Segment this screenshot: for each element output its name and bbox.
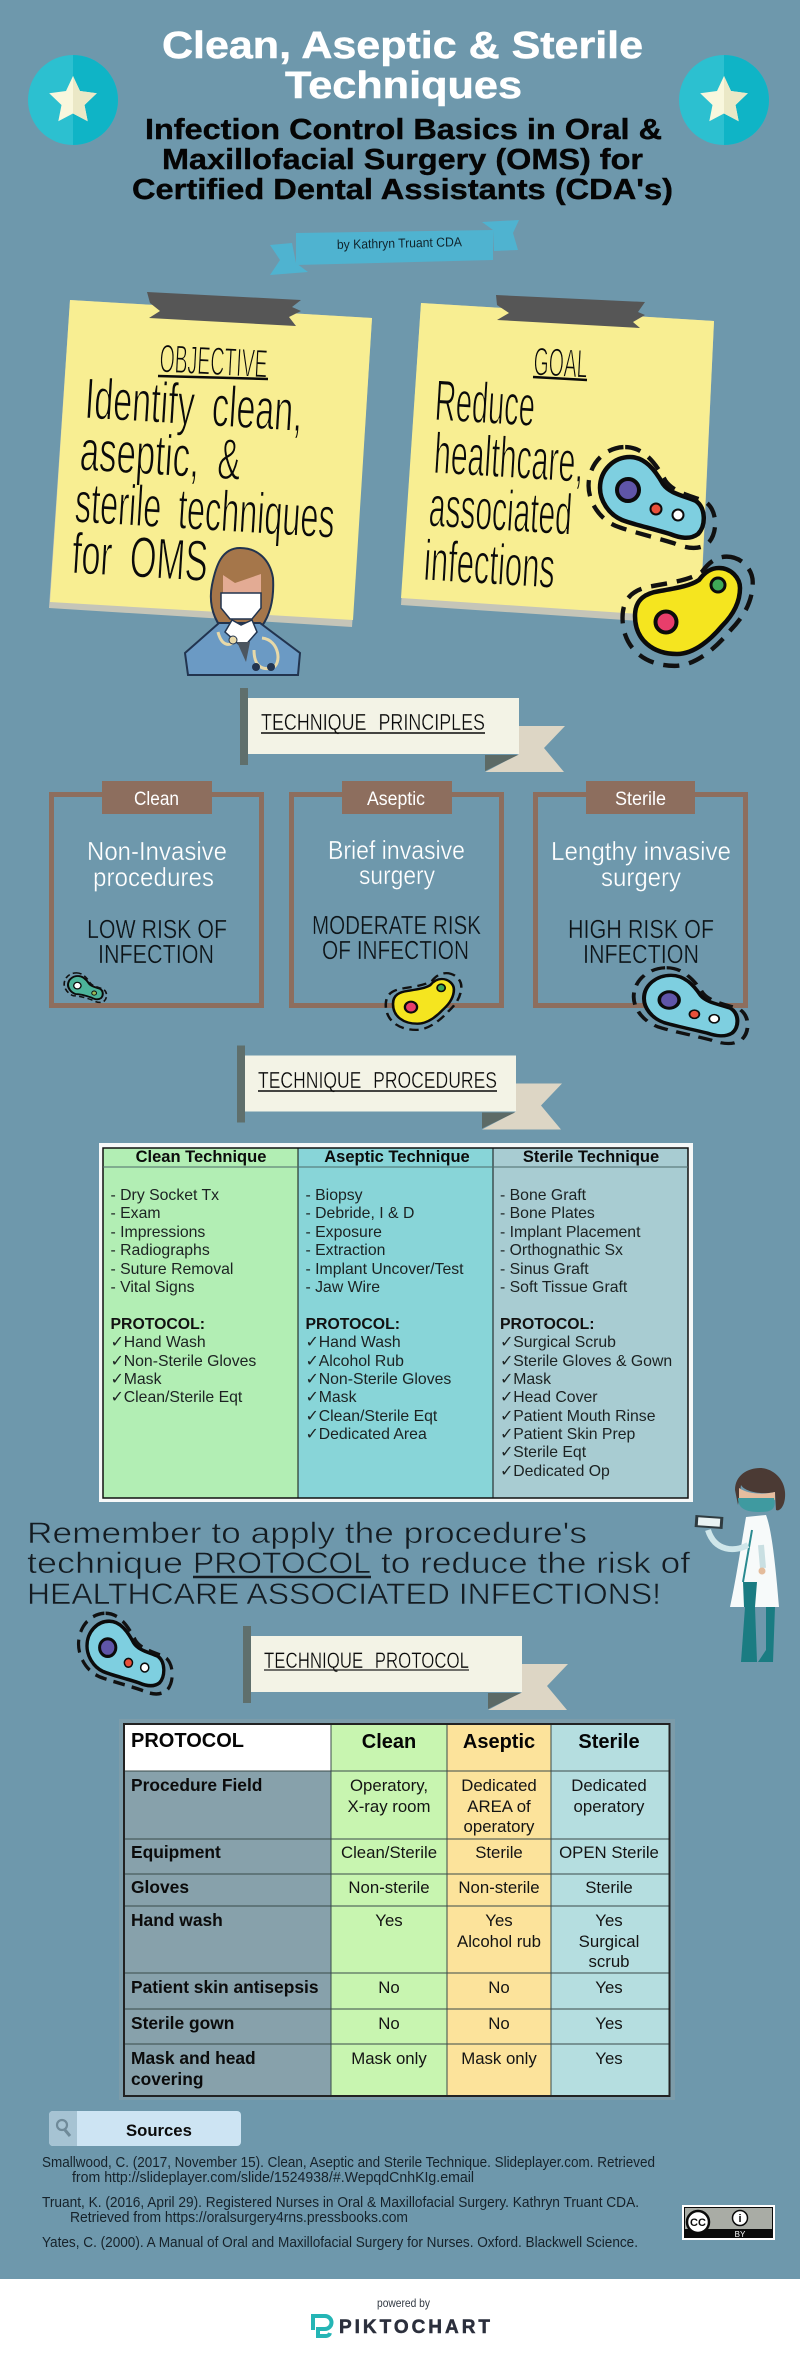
column: aseptic technique: ✓Dedicated Area — [306, 1426, 427, 1443]
row: procedure field: operatory — [464, 1817, 535, 1836]
row: procedure field: AREA of — [467, 1797, 531, 1816]
references: Retrieved from https://oralsurgery4rns.pressbooks.com — [70, 2209, 408, 2226]
references: Yates, C. (2000). A Manual of Oral and Maxillofacial Surgery for Nurses. Oxford. Blackwell Science. — [42, 2234, 638, 2251]
clean description: procedures — [93, 862, 214, 892]
column: sterile technique: - Bone Plates — [500, 1205, 595, 1222]
reminder text — [27, 1517, 691, 1611]
sterile tab: Sterile — [615, 789, 666, 810]
aseptic risk — [312, 910, 482, 965]
row: gloves: Gloves — [131, 1877, 189, 1897]
icon: star badge right — [679, 55, 769, 145]
icon: blue bacteria on sterile card — [634, 968, 748, 1043]
row: sterile gown — [131, 2013, 623, 2033]
row: patient skin antisepsis: No — [378, 1978, 400, 1997]
sterile risk: INFECTION — [583, 939, 699, 969]
title: Techniques — [285, 65, 522, 107]
column: sterile technique: - Bone Graft — [500, 1187, 587, 1204]
column: sterile technique: PROTOCOL: — [500, 1316, 594, 1333]
objective text: sterile techniques — [73, 470, 337, 551]
panel: objective sticky note: OBJECTIVE — [159, 337, 269, 387]
icon: star badge left — [28, 55, 118, 145]
column: sterile technique: ✓Patient Mouth Rinse — [500, 1408, 656, 1425]
heading: technique protocol — [243, 1626, 568, 1710]
row: equipment: OPEN Sterile — [559, 1843, 659, 1862]
sterile tab — [586, 781, 695, 814]
heading: technique principles: TECHNIQUE PRINCIPLES — [261, 709, 485, 735]
tape — [147, 292, 301, 326]
protocol header row: Sterile — [578, 1731, 640, 1753]
footer: powered by — [377, 2296, 430, 2310]
row: equipment: Sterile — [475, 1843, 523, 1862]
protocol header row: PROTOCOL — [131, 1730, 244, 1752]
reminder text: technique — [27, 1547, 183, 1580]
column: aseptic technique — [306, 1148, 470, 1443]
column: clean technique: - Radiographs — [110, 1242, 210, 1259]
clean tab — [102, 781, 212, 814]
author ribbon: by Kathryn Truant CDA — [337, 234, 462, 252]
reminder text: HEALTHCARE ASSOCIATED INFECTIONS! — [27, 1578, 661, 1611]
row: mask and head covering — [131, 2048, 623, 2089]
panel: goal sticky note: GOAL — [533, 340, 589, 387]
column: clean technique: ✓Mask — [110, 1371, 162, 1388]
icon: dentist with mask — [185, 548, 300, 675]
goal text: Reduce — [433, 368, 537, 439]
column: clean technique: ✓Clean/Sterile Eqt — [110, 1389, 243, 1406]
panel: goal sticky note — [401, 295, 714, 625]
column: aseptic technique: - Implant Uncover/Test — [306, 1261, 464, 1278]
column: clean technique: - Impressions — [110, 1224, 205, 1241]
objective text: aseptic, & — [78, 418, 243, 493]
row: mask and head covering: covering — [131, 2069, 203, 2089]
row: sterile gown: No — [488, 2014, 510, 2033]
column: sterile technique: - Implant Placement — [500, 1224, 641, 1241]
author ribbon — [270, 220, 519, 275]
clean tab: Clean — [134, 789, 179, 810]
goal text: associated — [427, 474, 574, 548]
title: Clean, Aseptic & Sterile — [162, 25, 643, 67]
row: hand wash: Surgical — [579, 1932, 639, 1951]
column: sterile technique: - Sinus Graft — [500, 1261, 589, 1278]
aseptic risk: OF INFECTION — [322, 935, 469, 965]
aseptic description — [328, 835, 465, 890]
protocol header row: Aseptic — [463, 1731, 535, 1753]
row: procedure field: Operatory, — [350, 1776, 428, 1795]
protocol header row: Clean — [362, 1731, 416, 1753]
icon: creative commons badge: i — [738, 2213, 742, 2225]
sterile risk — [568, 914, 714, 969]
column: aseptic technique: ✓Non-Sterile Gloves — [306, 1371, 451, 1388]
column: clean technique: - Exam — [110, 1205, 161, 1222]
row: hand wash: Hand wash — [131, 1910, 223, 1930]
column: aseptic technique: ✓Alcohol Rub — [306, 1353, 404, 1370]
row: hand wash: Alcohol rub — [457, 1932, 541, 1951]
column: clean technique: PROTOCOL: — [110, 1316, 205, 1333]
references: from http://slideplayer.com/slide/1524938/#.WepqdCnhKIg.email — [72, 2169, 474, 2186]
icon: magnifier — [57, 2120, 70, 2136]
panel: clean card — [52, 781, 262, 1006]
column: clean technique — [110, 1148, 266, 1406]
column: clean technique: Clean Technique — [136, 1148, 266, 1166]
icon: blue bacteria near reminder — [79, 1613, 172, 1694]
protocol header row — [131, 1730, 640, 1753]
column: clean technique: - Vital Signs — [110, 1279, 195, 1296]
clean description — [87, 836, 227, 892]
column: aseptic technique: ✓Hand Wash — [306, 1334, 401, 1351]
subtitle: Infection Control Basics in Oral & — [145, 114, 662, 146]
aseptic risk: MODERATE RISK — [312, 910, 482, 940]
clean risk — [87, 914, 227, 969]
heading: technique procedures — [237, 1046, 562, 1130]
icon: piktochart logo — [313, 2316, 332, 2336]
reminder text: PROTOCOL — [193, 1547, 371, 1580]
column: aseptic technique: PROTOCOL: — [306, 1316, 400, 1333]
heading: technique protocol: TECHNIQUE PROTOCOL — [264, 1648, 469, 1673]
references: Smallwood, C. (2017, November 15). Clean, Aseptic and Sterile Technique. Slideplayer.com. Retrieved — [42, 2154, 655, 2171]
icon: yellow bacteria on aseptic card — [386, 973, 461, 1030]
references — [42, 2154, 655, 2251]
icon: creative commons badge: CC — [690, 2217, 706, 2229]
column: aseptic technique: Aseptic Technique — [324, 1148, 470, 1166]
row: patient skin antisepsis: Patient skin antisepsis — [131, 1977, 319, 1997]
aseptic tab — [342, 781, 452, 814]
aseptic tab: Aseptic — [367, 789, 425, 810]
row: equipment: Clean/Sterile — [341, 1843, 437, 1862]
row: hand wash — [131, 1910, 639, 1971]
row: hand wash: Yes — [375, 1911, 403, 1930]
objective text — [70, 366, 337, 594]
column: clean technique: - Suture Removal — [110, 1261, 233, 1278]
row: sterile gown: No — [378, 2014, 400, 2033]
column: aseptic technique: - Debride, I & D — [306, 1205, 414, 1222]
icon: creative commons badge: BY — [735, 2230, 746, 2239]
column: clean technique: ✓Hand Wash — [110, 1334, 206, 1351]
sources button: Sources — [126, 2121, 192, 2140]
clean risk: LOW RISK OF — [87, 914, 227, 944]
column: sterile technique — [500, 1148, 672, 1480]
references: Truant, K. (2016, April 29). Registered Nurses in Oral & Maxillofacial Surgery. Kathryn Truant CDA. — [42, 2194, 639, 2211]
clean risk: INFECTION — [98, 939, 214, 969]
heading: technique procedures: TECHNIQUE PROCEDURES — [258, 1067, 497, 1093]
row: equipment — [131, 1842, 659, 1862]
column: aseptic technique: - Jaw Wire — [306, 1279, 380, 1296]
aseptic description: surgery — [359, 860, 435, 890]
icon: green bacteria — [64, 973, 107, 1002]
reminder text: Remember to apply the procedure's — [27, 1517, 587, 1550]
subtitle: Maxillofacial Surgery (OMS) for — [162, 144, 643, 176]
footer: PIKTOCHART — [339, 2317, 490, 2338]
row: equipment: Equipment — [131, 1842, 221, 1862]
row: procedure field: X-ray room — [348, 1797, 430, 1816]
column: sterile technique: - Orthognathic Sx — [500, 1242, 623, 1259]
subtitle — [132, 114, 673, 206]
column: clean technique: - Dry Socket Tx — [110, 1187, 219, 1204]
icon: creative commons badge — [682, 2205, 775, 2240]
sterile description: surgery — [601, 862, 681, 892]
column: sterile technique: ✓Patient Skin Prep — [500, 1426, 636, 1443]
row: mask and head covering: Mask only — [461, 2049, 537, 2068]
tape — [496, 295, 645, 328]
row: sterile gown: Yes — [595, 2014, 623, 2033]
subtitle: Certified Dental Assistants (CDA's) — [132, 174, 673, 206]
sterile description — [551, 836, 731, 892]
table: technique protocol — [119, 1719, 675, 2100]
column: sterile technique: ✓Dedicated Op — [500, 1463, 610, 1480]
row: procedure field: Procedure Field — [131, 1775, 262, 1795]
row: procedure field — [131, 1775, 647, 1836]
icon: yellow bacteria on goal note — [623, 557, 753, 666]
heading: technique principles — [240, 688, 565, 772]
row: patient skin antisepsis — [131, 1977, 623, 1997]
column: aseptic technique: - Exposure — [306, 1224, 382, 1241]
sterile description: Lengthy invasive — [551, 836, 731, 866]
row: patient skin antisepsis: No — [488, 1978, 510, 1997]
table: technique procedures — [99, 1143, 693, 1502]
column: aseptic technique: - Extraction — [306, 1242, 385, 1259]
column: sterile technique: ✓Sterile Gloves & Gown — [500, 1353, 672, 1370]
icon: blue bacteria on goal note — [589, 447, 715, 548]
goal text — [422, 368, 586, 601]
goal text: infections — [422, 528, 557, 601]
column: sterile technique: ✓Sterile Eqt — [500, 1444, 587, 1461]
row: hand wash: Yes — [595, 1911, 623, 1930]
column: aseptic technique: - Biopsy — [306, 1187, 363, 1204]
title — [162, 25, 643, 107]
column: sterile technique: - Soft Tissue Graft — [500, 1279, 628, 1296]
column: aseptic technique: ✓Clean/Sterile Eqt — [306, 1408, 438, 1425]
row: procedure field: Dedicated — [571, 1776, 647, 1795]
row: procedure field: Dedicated — [461, 1776, 537, 1795]
objective text: for OMS — [70, 521, 210, 594]
row: gloves: Non-sterile — [348, 1878, 430, 1897]
goal text: healthcare, — [432, 421, 586, 495]
panel: objective sticky note — [49, 292, 372, 627]
row: mask and head covering: Mask and head — [131, 2048, 256, 2068]
column: sterile technique: ✓Surgical Scrub — [500, 1334, 616, 1351]
row: sterile gown: Sterile gown — [131, 2013, 234, 2033]
row: mask and head covering: Mask only — [351, 2049, 427, 2068]
column: sterile technique: ✓Head Cover — [500, 1389, 598, 1406]
row: gloves: Sterile — [585, 1878, 633, 1897]
column: clean technique: ✓Non-Sterile Gloves — [110, 1353, 256, 1370]
row: hand wash: Yes — [485, 1911, 513, 1930]
objective heading — [158, 337, 269, 387]
row: hand wash: scrub — [588, 1952, 630, 1971]
panel: aseptic card — [292, 781, 502, 1006]
row: gloves — [131, 1877, 633, 1897]
row: patient skin antisepsis: Yes — [595, 1978, 623, 1997]
reminder text: to reduce the risk of — [381, 1547, 691, 1580]
aseptic description: Brief invasive — [328, 835, 465, 865]
row: procedure field: operatory — [574, 1797, 645, 1816]
column: sterile technique: Sterile Technique — [523, 1148, 659, 1166]
row: gloves: Non-sterile — [458, 1878, 540, 1897]
objective text: Identify clean, — [83, 366, 305, 444]
clean description: Non-Invasive — [87, 836, 227, 866]
column: sterile technique: ✓Mask — [500, 1371, 551, 1388]
sources button — [49, 2111, 241, 2146]
row: mask and head covering: Yes — [595, 2049, 623, 2068]
panel: sterile card — [536, 781, 746, 1006]
sterile risk: HIGH RISK OF — [568, 914, 714, 944]
goal heading — [533, 340, 589, 387]
icon: nurse with tablet — [695, 1468, 785, 1662]
footer — [0, 2279, 800, 2359]
column: aseptic technique: ✓Mask — [306, 1389, 357, 1406]
